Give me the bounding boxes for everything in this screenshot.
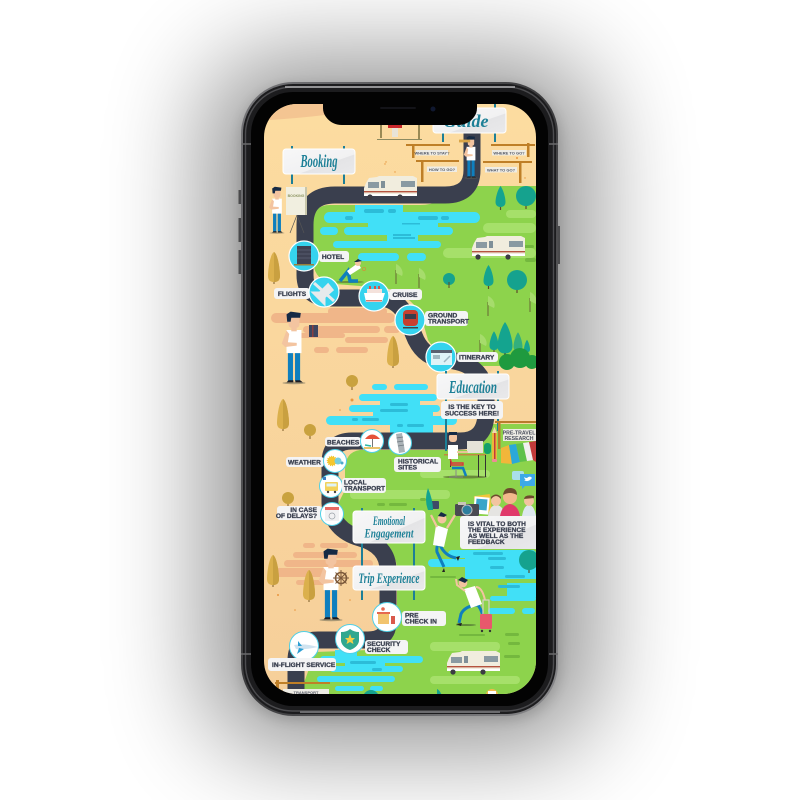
camera and photos	[455, 494, 492, 516]
green trees upper	[395, 186, 539, 370]
sign: emotional engagement: Emotional	[372, 514, 405, 528]
direction post: what to go: WHAT TO GO?	[487, 167, 516, 172]
group of people	[488, 488, 536, 516]
hotel icon	[289, 241, 319, 271]
security check icon	[336, 624, 364, 654]
phone body	[238, 82, 560, 716]
green tree bottom	[363, 690, 379, 706]
itinerary label	[457, 352, 498, 362]
flights label	[274, 288, 310, 299]
local transport icon	[320, 474, 342, 498]
yellow tree	[303, 570, 315, 602]
sand background	[264, 104, 536, 694]
historical sites label: HISTORICAL	[398, 458, 438, 466]
hotel label: HOTEL	[322, 254, 344, 261]
sign: emotional engagement: Engagement	[364, 526, 414, 540]
yellow tree	[268, 252, 280, 284]
security check label	[365, 640, 408, 654]
booking board and man	[269, 187, 307, 234]
is vital label: IS VITAL TO BOTH	[468, 521, 526, 528]
ground transport icon	[395, 305, 425, 335]
direction post: where to stay	[406, 144, 450, 158]
in case of delays icon	[320, 502, 344, 526]
in case of delays label: IN CASE	[290, 507, 318, 514]
running man with suitcase	[456, 577, 492, 632]
lake lower right	[428, 550, 536, 614]
lake lower left	[317, 650, 423, 691]
green tree by water	[519, 550, 539, 573]
desk and man at computer	[443, 432, 491, 478]
bottom wooden sign with transport label	[275, 680, 330, 695]
stack of books	[501, 441, 536, 464]
luggage tag bottom	[486, 689, 498, 701]
round yellow tree	[346, 375, 358, 390]
pre check in label: CHECK IN	[405, 618, 437, 626]
ground transport label: TRANSPORT	[428, 318, 469, 326]
beaches label	[325, 437, 361, 446]
phone drop shadow	[205, 55, 595, 750]
is vital label: AS WELL AS THE	[468, 533, 524, 540]
sign: education: Education	[448, 377, 497, 397]
sign: education	[437, 371, 509, 451]
in case of delays label: OF DELAYS?	[276, 513, 317, 520]
hotel label	[319, 251, 349, 262]
pre check in label: PRE	[405, 612, 419, 620]
sign: booking: Booking	[300, 151, 338, 171]
direction post: where to stay: WHERE TO STAY?	[414, 150, 450, 155]
is vital label	[460, 516, 540, 549]
flights label: FLIGHTS	[278, 291, 307, 298]
is the key label: SUCCESS HERE!	[445, 410, 499, 418]
booking board and man: BOOKING	[288, 194, 305, 198]
security check label: CHECK	[367, 647, 391, 654]
sign: guide	[433, 104, 506, 142]
van bottom	[447, 651, 500, 675]
van on grass	[472, 236, 525, 260]
in case of delays label	[276, 506, 322, 520]
yellow tree	[387, 336, 399, 368]
is vital label: FEEDBACK	[468, 539, 505, 546]
is the key label	[441, 401, 503, 419]
sand speckles	[277, 157, 526, 611]
weather label: WEATHER	[288, 460, 321, 466]
historical sites label	[394, 457, 441, 472]
campground shape at top	[377, 125, 422, 140]
beaches label: BEACHES	[327, 440, 360, 446]
security check label: SECURITY	[367, 641, 401, 648]
pre-travel research sign: RESEARCH	[504, 436, 534, 442]
historical sites label: SITES	[398, 464, 418, 472]
pencil	[492, 427, 497, 462]
is the key label: IS THE KEY TO	[448, 404, 496, 411]
in-flight service icon	[290, 632, 318, 660]
green tree near lower meadow	[426, 488, 433, 510]
in-flight service label	[268, 658, 336, 671]
man with telescope	[459, 136, 478, 179]
van on road	[364, 176, 417, 200]
cruise icon	[359, 281, 389, 311]
sand patches middle	[270, 308, 400, 585]
pre check in label	[402, 611, 446, 626]
local transport label: TRANSPORT	[344, 486, 385, 492]
winding road	[296, 125, 486, 694]
screen: illustrated journey map	[264, 104, 540, 706]
sign: booking	[283, 146, 355, 184]
weather icon	[324, 450, 346, 472]
man holding passport	[282, 312, 318, 384]
sign: guide: Guide	[444, 111, 489, 131]
sign: emotional engagement and trip experience posts	[353, 508, 425, 600]
sign: trip experience: Trip Experience	[358, 571, 420, 587]
bottom wooden sign with transport label: TRANSPORT	[294, 690, 319, 695]
ground transport label	[425, 311, 469, 326]
green land lower	[300, 424, 536, 694]
ground transport label: GROUND	[428, 312, 458, 320]
lake upper	[320, 205, 480, 261]
itinerary icon	[426, 342, 456, 372]
twitter bubble	[512, 471, 535, 489]
itinerary label: ITINERARY	[459, 354, 495, 362]
historical sites icon	[388, 432, 412, 454]
local transport label	[342, 478, 386, 493]
dark green grass marks	[377, 245, 536, 658]
round yellow tree	[304, 424, 316, 439]
yellow tree	[277, 399, 289, 431]
sand patch top left	[264, 104, 325, 120]
direction post: what to go	[483, 161, 532, 183]
green land upper	[313, 186, 536, 366]
phone notch	[323, 100, 477, 125]
weather label	[286, 457, 324, 467]
light green meadow patches	[350, 210, 536, 684]
pre-travel research sign: PRE-TRAVEL	[503, 430, 536, 436]
phone contact shadow	[240, 86, 560, 720]
pre check in icon	[372, 602, 402, 632]
beaches icon	[360, 430, 384, 452]
local transport label: LOCAL	[344, 480, 367, 486]
jumping man	[430, 501, 460, 572]
in-flight service label: IN-FLIGHT SERVICE	[272, 662, 336, 669]
direction post: where to go	[491, 143, 535, 157]
direction post: how to go: HOW TO GO?	[429, 167, 456, 172]
man with ship wheel	[319, 549, 349, 621]
green tree bottom small	[437, 689, 443, 698]
sign: emotional engagement	[353, 511, 425, 543]
round yellow tree	[282, 492, 294, 507]
cruise label: CRUISE	[393, 292, 418, 299]
direction post: where to go: WHERE TO GO?	[493, 150, 525, 155]
cruise label	[389, 289, 422, 300]
crouching man with magnifier	[336, 259, 366, 283]
is vital label: THE EXPERIENCE	[468, 527, 526, 534]
pre-travel research sign	[495, 421, 536, 449]
direction post: how to go	[416, 160, 459, 182]
lake middle	[326, 384, 457, 433]
yellow tree	[267, 555, 279, 587]
flights icon	[309, 277, 339, 307]
